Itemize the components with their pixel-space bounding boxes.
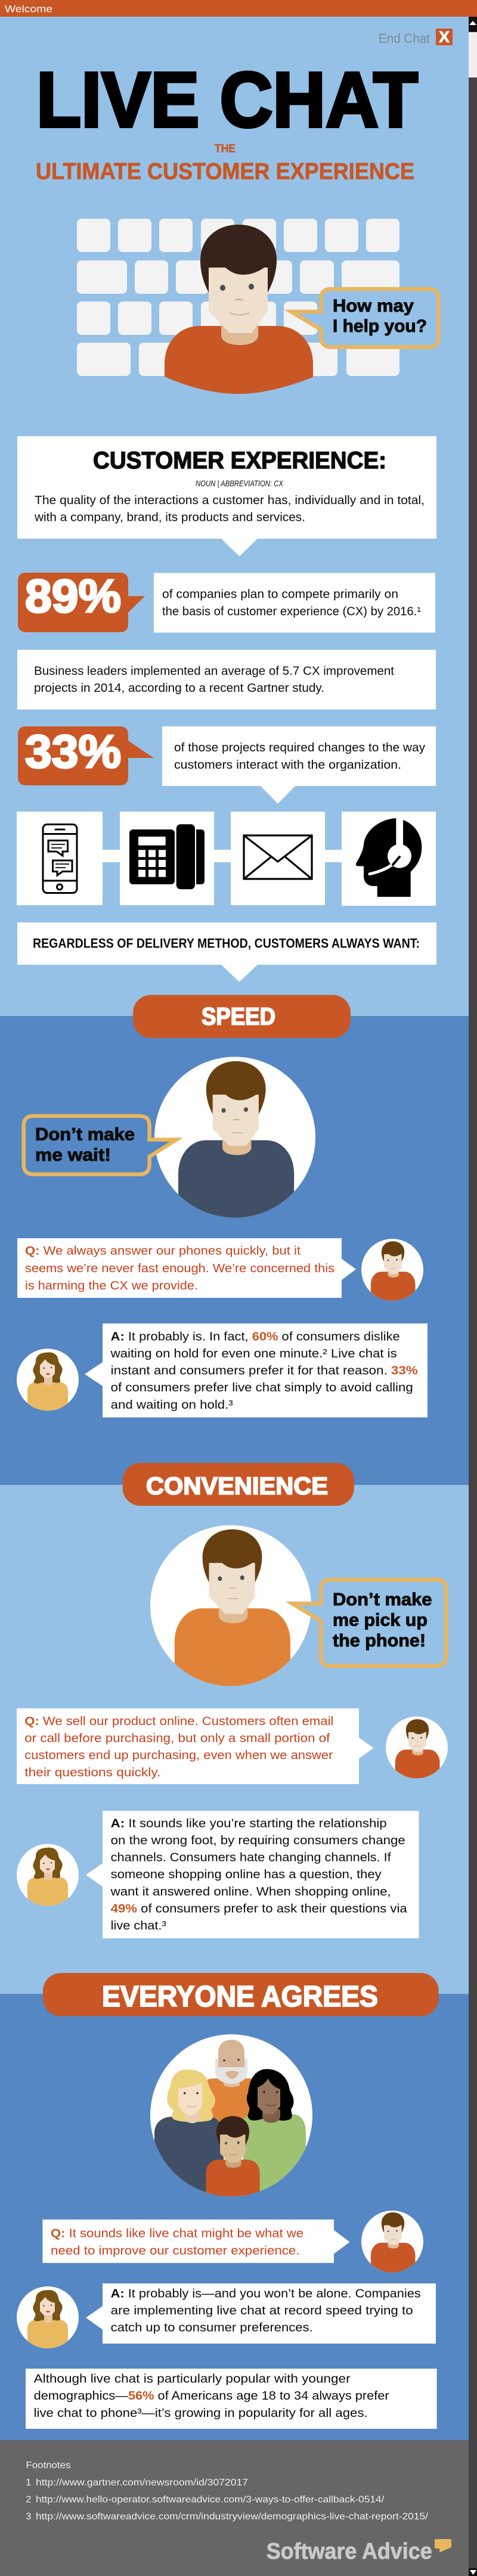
speech bubble: don't make me pick up the phone [292, 1580, 446, 1666]
answer bubble: convenience: want it answered online. When shopping online, [110, 1885, 391, 1898]
text block: business leaders: Business leaders implemented an average of 5.7 CX improvement [34, 665, 394, 678]
footer panel [0, 2440, 469, 2576]
illustration: phone-averse customer [150, 1525, 311, 1686]
speech bubble: don't make me pick up the phone: the phone! [333, 1631, 426, 1651]
panel: mobile chat icon [17, 812, 103, 905]
heading pill: convenience [123, 1463, 354, 1506]
avatar: advisor [17, 2286, 79, 2348]
answer bubble: speed: waiting on hold for even one minute.² Live chat is [110, 1347, 397, 1360]
question bubble: convenience: or call before purchasing, but only a small portion of [24, 1732, 330, 1745]
section background: speed [0, 1016, 469, 1485]
answer bubble: everyone agrees: A: It probably is—and you won’t be alone. Companies [111, 2287, 421, 2300]
panel: customer experience definition: with a company, brand, its products and services. [34, 511, 305, 524]
text block: projects required changes: customers interact with the organization. [174, 759, 401, 772]
footnotes: 1 [26, 2478, 31, 2488]
question bubble: everyone agrees: need to improve our customer experience. [51, 2244, 299, 2257]
question bubble: convenience [17, 1708, 373, 1784]
subtitle: the: THE [215, 142, 236, 155]
callout: 33% [18, 725, 154, 785]
text block: projects required changes: of those projects required changes to the way [174, 741, 425, 754]
end chat button: X [439, 28, 450, 46]
illustration: support agent [165, 225, 313, 394]
illustration: keyboard [77, 219, 399, 376]
answer bubble: convenience: channels. Consumers hate changing channels. If [111, 1851, 391, 1865]
footnotes: http://www.gartner.com/newsroom/id/3072017 [36, 2478, 248, 2488]
callout: 33%: 33% [25, 725, 121, 778]
channel connector [103, 850, 342, 862]
text block: business leaders: projects in 2014, according to a recent Gartner study. [34, 682, 324, 695]
heading pill: everyone agrees: EVERYONE AGREES [102, 1981, 378, 2013]
title bar [0, 0, 477, 17]
question bubble: speed: is harming the CX we provide. [25, 1279, 198, 1292]
main title: LIVE CHAT [36, 56, 418, 143]
avatar: advisor [17, 1844, 79, 1906]
text block: live chat across ages: live chat to phone³—it’s growing in popularity for all ages. [34, 2407, 368, 2420]
avatar: advisor [17, 1348, 79, 1411]
woman with black hair [243, 2069, 306, 2205]
illustration: diverse group of customers [150, 2034, 312, 2196]
text block: companies plan to compete: the basis of customer experience (CX) by 2016.¹ [162, 605, 421, 619]
question bubble: speed [17, 1238, 356, 1298]
answer bubble: convenience [86, 1811, 419, 1938]
question bubble: convenience: customers end up purchasing, even when we answer [24, 1749, 333, 1762]
answer bubble: speed: of consumers prefer live chat simply to avoid calling [111, 1381, 413, 1394]
logo: software advice: Software Advice [267, 2539, 432, 2564]
title bar: Welcome [5, 4, 52, 14]
answer bubble: everyone agrees: catch up to consumer preferences. [111, 2322, 313, 2335]
question bubble: speed: seems we’re never fast enough. We’re concerned this [25, 1262, 334, 1275]
question bubble: convenience: Q: We sell our product online. Customers often email [24, 1715, 333, 1728]
speech bubble: don't make me wait [24, 1116, 176, 1174]
panel: customer experience definition [17, 436, 436, 557]
panel: customer experience definition: NOUN | ABBREVIATION: CX [196, 479, 284, 488]
speech bubble: don't make me wait: me wait! [35, 1145, 111, 1165]
footnotes [26, 2460, 429, 2522]
heading pill: speed [133, 995, 351, 1038]
illustration: impatient customer [154, 1057, 315, 1218]
blonde woman [154, 2069, 224, 2205]
panel: customer experience definition: CUSTOMER EXPERIENCE: [93, 448, 386, 474]
footnotes: 2 [26, 2495, 31, 2505]
text block: live chat across ages: demographics— 56% of Americans age 18 to 34 always prefer [34, 2389, 389, 2403]
heading pill: everyone agrees [43, 1973, 439, 2016]
end chat button [379, 28, 453, 46]
answer bubble: speed [85, 1323, 428, 1418]
banner: regardless of delivery method: REGARDLESS OF DELIVERY METHOD, CUSTOMERS ALWAYS WANT: [33, 936, 420, 951]
banner: regardless of delivery method [17, 922, 436, 982]
answer bubble: convenience: someone shopping online has a question, they [111, 1868, 382, 1881]
text block: live chat across ages: Although live chat is particularly popular with younger [34, 2373, 351, 2386]
answer bubble: convenience: on the wrong foot, by requiring consumers change [111, 1834, 405, 1847]
text block: companies plan to compete [154, 573, 435, 633]
panel: envelope icon [231, 812, 325, 905]
callout: 89% [18, 570, 145, 632]
question bubble: everyone agrees [42, 2220, 350, 2263]
answer bubble: everyone agrees: are implementing live chat at record speed trying to [111, 2304, 413, 2317]
panel: customer experience definition: The quality of the interactions a customer has, individually and in total, [35, 494, 425, 507]
answer bubble: everyone agrees [86, 2283, 436, 2344]
answer bubble: convenience: A: It sounds like you’re starting the relationship [111, 1817, 387, 1831]
answer bubble: speed: instant and consumers prefer it for that reason. 33% [111, 1365, 418, 1378]
speech bubble: don't make me pick up the phone: Don’t make [333, 1590, 432, 1609]
avatar: business owner [361, 1239, 423, 1301]
speech bubble: how may I help you [291, 289, 439, 347]
section background: convenience [0, 1485, 469, 1994]
footnotes: 3 [26, 2512, 31, 2522]
panel: headset agent icon [342, 812, 436, 906]
end chat button: End Chat [379, 31, 430, 46]
question bubble: speed: Q: We always answer our phones quickly, but it [25, 1245, 301, 1258]
footnotes: http://www.softwareadvice.com/crm/industryview/demographics-live-chat-report-2015/ [36, 2512, 429, 2522]
older man with beard [207, 2040, 252, 2123]
answer bubble: convenience: live chat.³ [111, 1919, 166, 1932]
footnotes: http://www.hello-operator.softwareadvice.com/3-ways-to-offer-callback-0514/ [36, 2495, 385, 2505]
footnotes: Footnotes [26, 2460, 70, 2471]
heading pill: speed: SPEED [202, 1003, 275, 1030]
speech bubble: how may I help you: I help you? [333, 316, 427, 336]
young man [206, 2116, 260, 2196]
speech bubble: don't make me wait: Don’t make [35, 1124, 135, 1144]
section background: everyone agrees [0, 1994, 469, 2440]
scrollbar [469, 17, 477, 2576]
speech bubble: don't make me pick up the phone: me pick up [333, 1611, 428, 1630]
answer bubble: speed: and waiting on hold.³ [111, 1399, 233, 1412]
callout: 89%: 89% [25, 570, 121, 622]
answer bubble: speed: A: It probably is. In fact, 60% of consumers dislike [111, 1331, 400, 1344]
text block: live chat across ages [26, 2369, 437, 2429]
heading pill: convenience: CONVENIENCE [146, 1472, 328, 1500]
avatar: business owner [361, 2211, 423, 2273]
subtitle: ultimate customer experience: ULTIMATE CUSTOMER EXPERIENCE [36, 159, 414, 184]
question bubble: everyone agrees: Q: It sounds like live chat might be what we [51, 2227, 303, 2241]
question bubble: convenience: their questions quickly. [24, 1766, 160, 1779]
text block: projects required changes [162, 726, 436, 804]
section background: intro [0, 17, 469, 1016]
text block: companies plan to compete: of companies plan to compete primarily on [162, 588, 398, 601]
avatar: business owner [386, 1716, 448, 1778]
text block: business leaders [17, 650, 436, 710]
answer bubble: convenience: 49% of consumers prefer to ask their questions via [111, 1902, 408, 1915]
panel: desk phone icon [120, 812, 214, 905]
speech bubble: how may I help you: How may [333, 296, 414, 316]
